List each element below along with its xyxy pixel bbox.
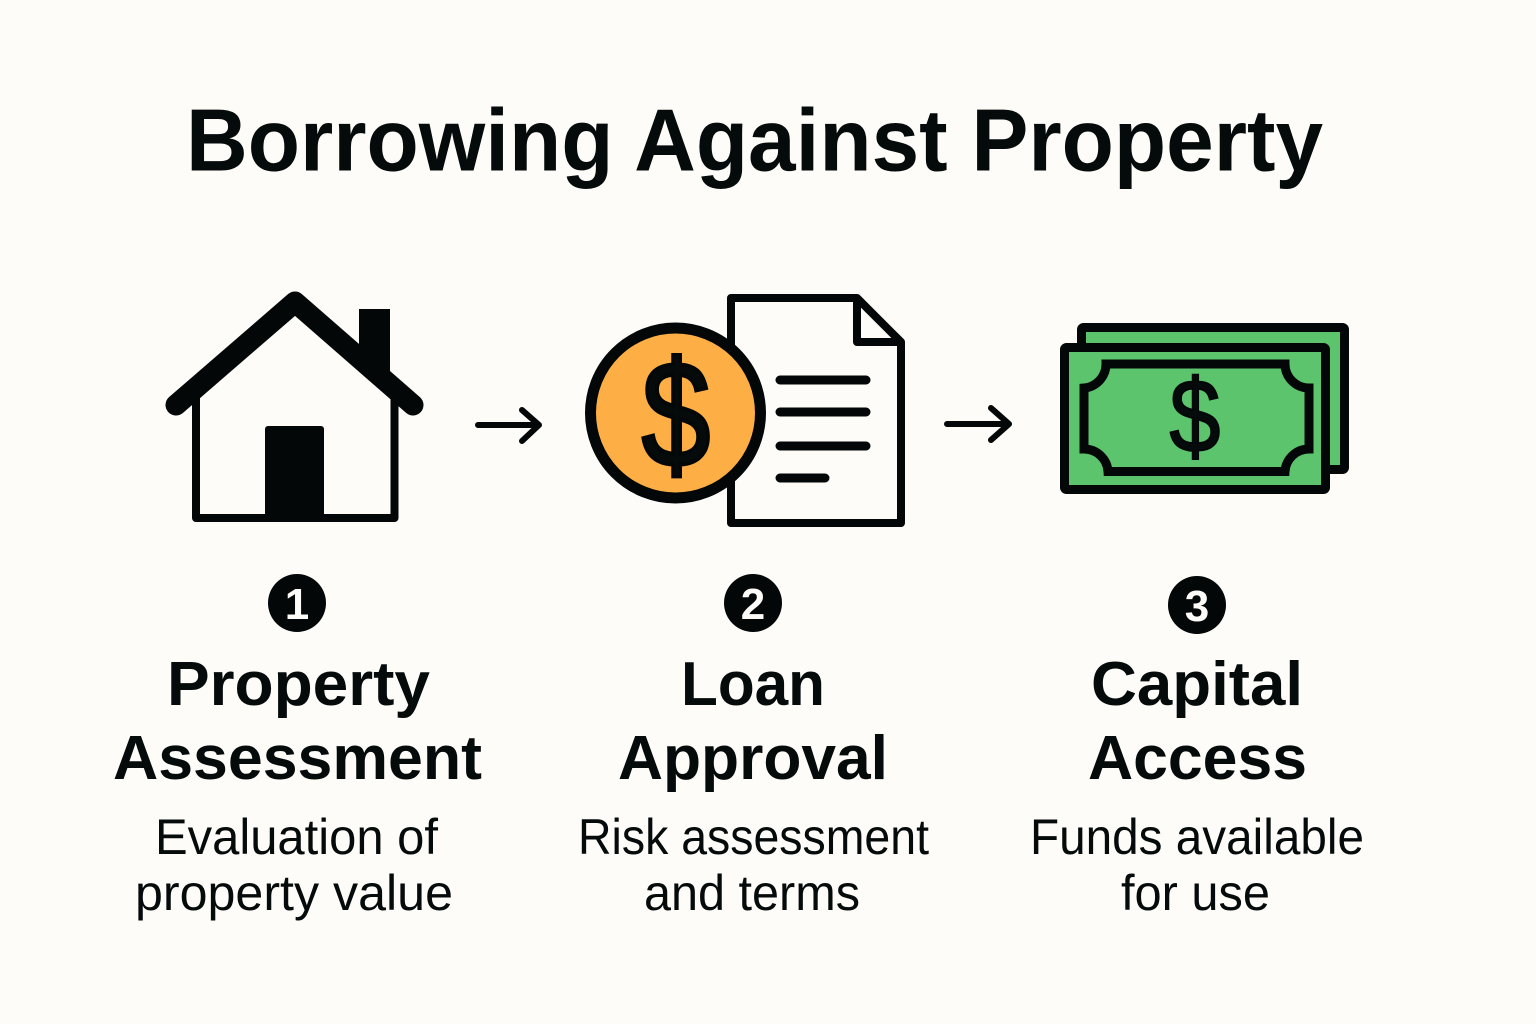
icon: house xyxy=(176,302,413,520)
number badge 2: 2 xyxy=(741,580,765,629)
number badge 1 xyxy=(268,574,326,632)
step 3 xyxy=(1030,576,1364,921)
step 2 heading: Approval xyxy=(618,724,888,793)
step 1 heading xyxy=(113,650,482,793)
step 2 description: Risk assessment xyxy=(578,809,929,865)
number badge 1: 1 xyxy=(285,580,309,629)
step 2 description: and terms xyxy=(644,865,860,921)
number badge 3 xyxy=(1168,576,1226,634)
step 2 xyxy=(578,574,929,921)
step 3 description: for use xyxy=(1121,865,1270,921)
icon: banknotes xyxy=(1064,328,1344,490)
step 2 heading xyxy=(618,650,888,793)
step 3 heading: Access xyxy=(1088,724,1307,793)
step 3 description: Funds available xyxy=(1030,809,1364,865)
step 1 description: Evaluation of xyxy=(155,809,438,865)
step 3 heading: Capital xyxy=(1091,650,1303,719)
icon: banknotes: $ xyxy=(1170,358,1220,474)
step 1 heading: Assessment xyxy=(113,724,482,793)
step 3 heading xyxy=(1088,650,1307,793)
icon: coin and document xyxy=(590,298,901,523)
step 2 description xyxy=(578,809,929,921)
step 1 xyxy=(113,574,482,921)
step 1 description xyxy=(135,809,453,921)
step 1 heading: Property xyxy=(167,650,431,719)
title: Borrowing Against Property xyxy=(186,90,1323,190)
step 1 description: property value xyxy=(135,865,453,921)
step 2 heading: Loan xyxy=(681,650,825,719)
icon: coin and document: $ xyxy=(642,331,710,499)
step 3 description xyxy=(1030,809,1364,921)
arrow: step 2 to step 3 xyxy=(947,408,1009,440)
number badge 2 xyxy=(724,574,782,632)
number badge 3: 3 xyxy=(1185,582,1209,631)
arrow: step 1 to step 2 xyxy=(478,410,539,441)
